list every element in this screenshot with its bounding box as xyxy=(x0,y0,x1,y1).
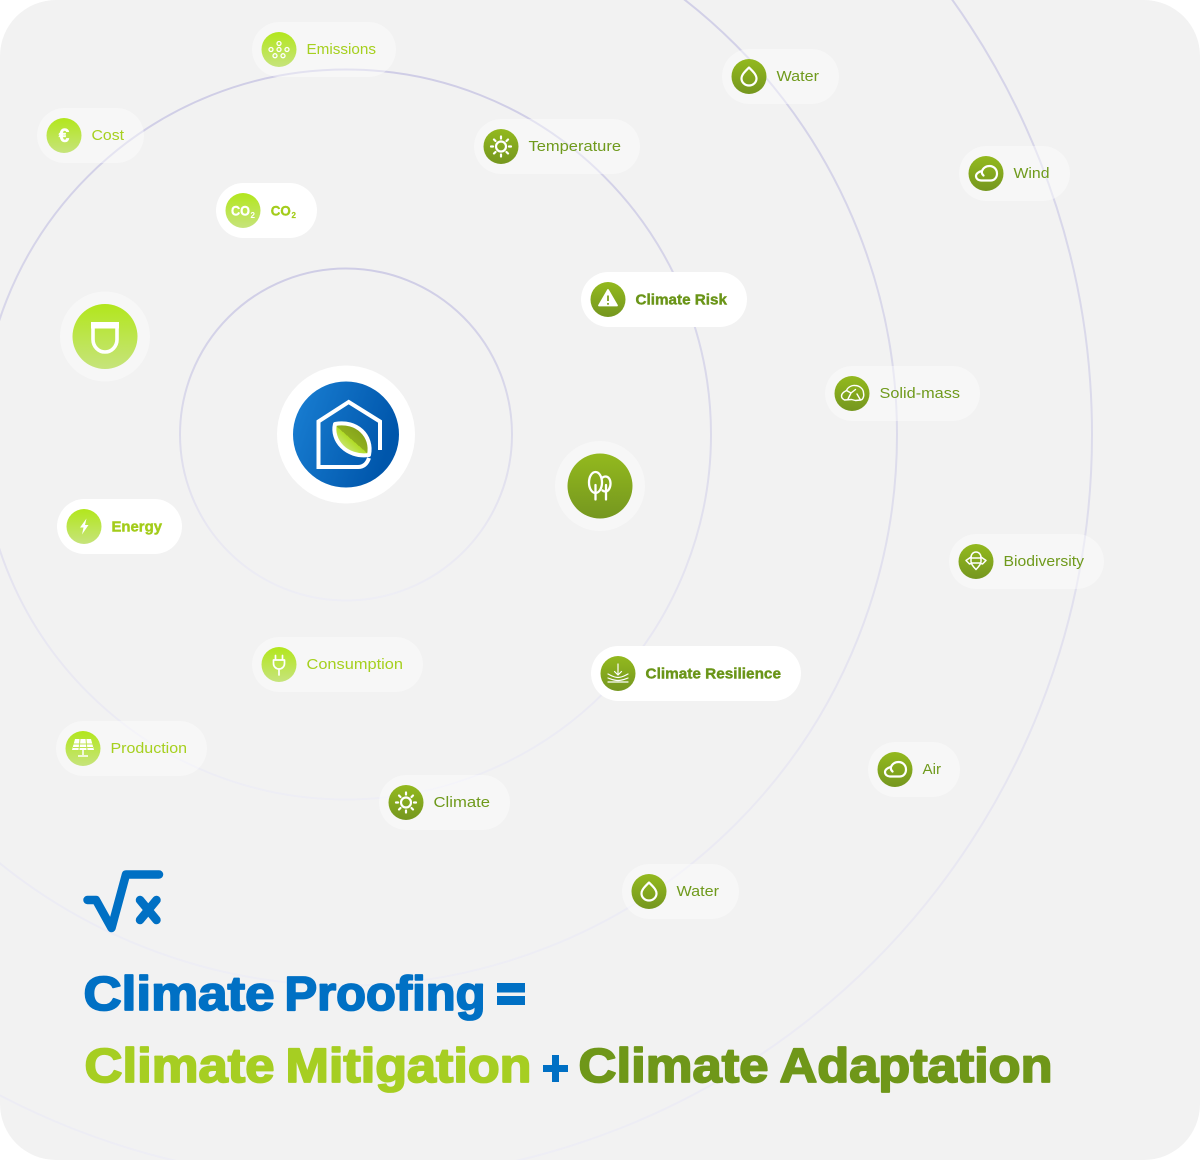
label: Emissions: Emissions xyxy=(306,42,376,58)
pill: Biodiversity xyxy=(949,534,1104,589)
pill: Cost xyxy=(37,108,144,163)
label: Solid-mass: Solid-mass xyxy=(880,386,960,402)
pill: Consumption xyxy=(252,637,423,692)
icon: bolt xyxy=(66,509,102,544)
pill: Climate Risk xyxy=(581,272,747,327)
pill: Water top xyxy=(722,49,839,104)
label: Water: Water xyxy=(776,69,819,85)
pill: Climate Resilience xyxy=(591,646,801,701)
label: CO2: 2 xyxy=(292,211,296,220)
label: Consumption: Consumption xyxy=(306,657,403,673)
title: Climate Proofing equation: Proofing xyxy=(284,968,486,1021)
pill: Temperature xyxy=(474,119,640,174)
icon: CO2 xyxy=(226,193,260,228)
pill: Water bottom xyxy=(622,864,739,919)
pill: Climate xyxy=(379,775,510,830)
icon: drop xyxy=(732,59,766,94)
title: Climate Proofing equation xyxy=(84,968,525,1021)
label: Cost: Cost xyxy=(92,128,124,144)
label: Climate Risk: Climate Risk xyxy=(636,292,728,308)
icon: square root x xyxy=(88,874,159,928)
concentric rings xyxy=(0,0,1093,980)
icon: rock xyxy=(834,376,870,411)
label: Energy: Energy xyxy=(112,520,162,536)
logo halo xyxy=(277,366,415,504)
icon: cloud xyxy=(968,156,1004,191)
pill: Energy xyxy=(57,499,182,554)
title: Climate Proofing equation: Climate xyxy=(84,968,274,1021)
icon: sun xyxy=(484,129,518,164)
icon: resilience xyxy=(600,656,636,691)
title: mitigation plus adaptation: Climate xyxy=(84,1040,274,1093)
label: Biodiversity: Biodiversity xyxy=(1004,554,1085,570)
central logo xyxy=(277,366,415,504)
title: mitigation plus adaptation: Climate xyxy=(578,1040,768,1093)
icon: mitigation shield xyxy=(60,292,150,382)
house outline xyxy=(318,402,380,467)
label: Temperature: Temperature xyxy=(528,139,621,155)
icon: CO2: 2 xyxy=(250,211,256,220)
logo disc xyxy=(293,382,399,488)
pill: Air xyxy=(868,742,960,797)
pill: Wind xyxy=(959,146,1070,201)
icon: warning xyxy=(590,282,626,317)
label: Production: Production xyxy=(110,741,187,757)
icon: CO2: CO xyxy=(231,202,250,218)
pill: Solid-mass xyxy=(825,366,980,421)
title: mitigation plus adaptation xyxy=(84,1040,1052,1093)
label: Climate: Climate xyxy=(434,795,490,811)
icon: drop xyxy=(632,874,666,909)
icon: bee xyxy=(958,544,994,579)
icon: plug xyxy=(262,647,296,682)
label: Air: Air xyxy=(922,762,941,778)
icon: euro: € xyxy=(59,126,70,147)
pill: CO2 xyxy=(216,183,317,238)
label: Climate Resilience: Climate Resilience xyxy=(646,666,781,682)
label: Water: Water xyxy=(676,884,719,900)
pill: Production xyxy=(56,721,207,776)
title: mitigation plus adaptation: Adaptation xyxy=(780,1040,1052,1093)
title: mitigation plus adaptation: Mitigation xyxy=(286,1040,532,1093)
leaf xyxy=(334,423,370,455)
icon: sun xyxy=(388,785,424,820)
label: CO2: CO xyxy=(271,202,291,218)
icon: emissions xyxy=(262,32,296,67)
icon: adaptation trees xyxy=(555,441,645,531)
icon: solar panel xyxy=(66,731,100,766)
label: Wind: Wind xyxy=(1014,166,1050,182)
pill: Emissions xyxy=(252,22,396,77)
icon: cloud xyxy=(878,752,912,787)
